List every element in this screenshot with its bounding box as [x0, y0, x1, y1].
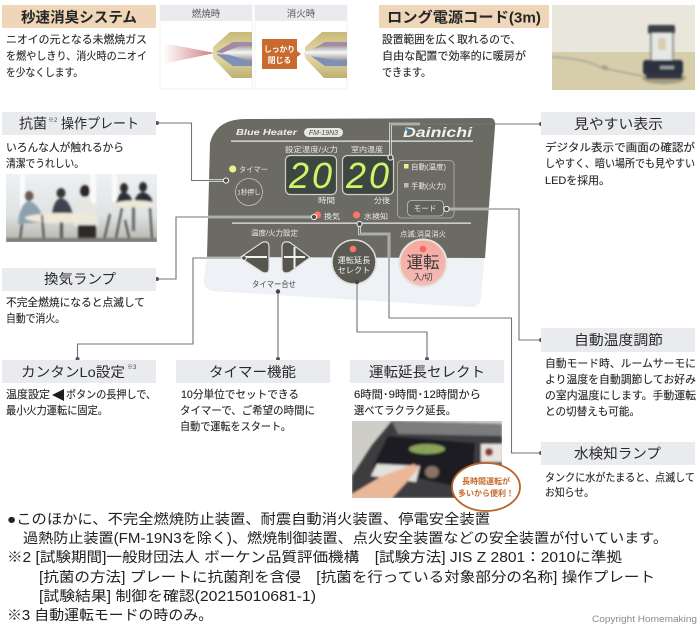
heading: easy Lo setting: カンタンLo設定 [21, 364, 125, 380]
text: ventilation description [6, 295, 145, 325]
text: display description: デジタル表示で画面の確認が [545, 140, 695, 154]
text: easy Lo description: 最小火力運転に固定。 [6, 404, 108, 417]
indicator lamps: ventilation and water detection [314, 211, 388, 221]
callout: closes tightly: 閉じる [268, 56, 291, 65]
text: long cord description [382, 32, 526, 79]
timer indicator and one-second button [229, 165, 268, 206]
panel: long power cord [379, 5, 695, 90]
text: ventilation description: 自動で消火。 [6, 311, 65, 325]
panel: rapid odor elimination system [2, 5, 347, 89]
footnotes: [試験結果] 制御を確認(20215010681-1) [39, 588, 316, 605]
display: room temperature: 分後 [374, 195, 390, 205]
button: power on off: 入/切 [413, 272, 433, 282]
heading: antibacterial plate [2, 112, 156, 135]
text: automatic temperature description: との切替えも可能。 [545, 404, 640, 418]
text: extended run description: 選べてラクラク延長。 [354, 404, 456, 417]
button: extended run select: 運転延長 [338, 255, 370, 265]
indicator lamps: ventilation and water detection: 水検知 [364, 211, 388, 221]
mode selector box: 手動(火力) [411, 180, 446, 190]
footnotes: ●このほかに、不完全燃焼防止装置、耐震自動消火装置、停電安全装置 [7, 510, 490, 528]
display: set temperature: 時間 [318, 196, 335, 205]
heading: easy Lo setting: ※3 [127, 364, 137, 371]
callout: closes tightly: しっかり [264, 45, 295, 54]
text: long cord description: 設置範囲を広く取れるので、 [382, 32, 521, 46]
text: easy Lo description: 温度設定 [6, 388, 50, 401]
text: automatic temperature description: 自動モード時、ルームサーモに [545, 356, 696, 370]
panel: timer function [176, 360, 330, 433]
heading: ventilation lamp [2, 268, 156, 291]
display: room temperature [342, 144, 394, 205]
text: automatic temperature description: の室内温度にします。手動運転 [545, 388, 696, 402]
brand: Dainichi logo: Dainichi [403, 125, 472, 140]
brand: Blue Heater model label [236, 127, 343, 137]
photo: people at cafe tables [6, 174, 157, 242]
heading: long power cord: ロング電源コード(3m) [387, 8, 541, 26]
button: power on off [400, 228, 446, 286]
footnotes [7, 510, 668, 624]
leader lines [76, 121, 543, 455]
heading: timer function [176, 360, 330, 383]
footnotes: [抗菌の方法] プレートに抗菌剤を含侵 [抗菌を行っている対象部分の名称] 操作プレート [39, 569, 655, 586]
button: power on off: 運転 [406, 253, 440, 272]
footnotes: ※3 自動運転モードの時のみ。 [7, 607, 213, 624]
photo: finger pressing heater panel [352, 421, 502, 498]
heading: extended run select [350, 360, 504, 383]
text: extended run description [354, 388, 481, 417]
text: long cord description: 自由な配置で効率的に暖房が [382, 48, 526, 62]
footnotes: ※2 [試験期間]一般財団法人 ボーケン品質評価機構 [試験方法] JIS Z 2801：2010に準拠 [7, 548, 622, 566]
control panel illustration [204, 118, 495, 307]
buttons: temperature left and right [240, 228, 310, 289]
heading: automatic temperature control [541, 328, 695, 352]
timer indicator and one-second button: タイマー [239, 165, 268, 174]
mode selector box [398, 160, 454, 218]
heading: antibacterial plate: ※2 [48, 117, 58, 124]
buttons: temperature left and right: タイマー合せ [252, 279, 296, 289]
panel: extended run select [350, 360, 520, 511]
diagram: nozzle while burning: 燃焼時 [192, 8, 221, 20]
text: easy Lo description [6, 387, 156, 417]
callout: convenient for long running: 長時間運転が [462, 476, 510, 486]
mode selector box: 自動(温度) [411, 162, 446, 172]
display: set temperature [285, 144, 338, 205]
button: extended run select [332, 240, 376, 284]
text: long cord description: できます。 [382, 66, 431, 79]
text: display description [545, 140, 695, 187]
text: timer description [180, 387, 315, 433]
heading: easy-to-see display: 見やすい表示 [574, 116, 663, 132]
button: power on off: 点滅:消臭消火 [400, 228, 446, 238]
text: antibacterial description: いろんな人が触れるから [6, 140, 124, 154]
text: antibacterial description [6, 140, 124, 170]
callout: convenient for long running [452, 463, 520, 511]
panel: automatic temperature control [541, 328, 696, 418]
panel: easy-to-see display [541, 112, 695, 187]
heading: rapid odor system: 秒速消臭システム [21, 8, 137, 26]
footnotes: 過熱防止装置(FM-19N3を除く)、燃焼制御装置、点火安全装置などの安全装置が付いています。 [23, 529, 668, 547]
display: set temperature: 設定温度/火力 [285, 144, 338, 154]
text: rapid odor description [6, 32, 147, 79]
heading: extended run select: 運転延長セレクト [369, 364, 485, 380]
timer indicator and one-second button: 1秒押し [237, 188, 261, 196]
text: rapid odor description: ニオイの元となる未燃焼ガス [6, 32, 147, 46]
callout: convenient for long running: 多いから便利！ [458, 488, 514, 498]
heading: easy Lo setting [2, 360, 156, 383]
heading: ventilation lamp: 換気ランプ [44, 271, 116, 287]
button: extended run select: セレクト [338, 266, 370, 275]
heading: antibacterial plate: 操作プレート [61, 116, 139, 132]
text: rapid odor description: を少なくします。 [6, 65, 83, 79]
indicator lamps: ventilation and water detection: 換気 [324, 211, 340, 221]
heading: antibacterial plate: 抗菌 [19, 116, 47, 132]
heading: timer function: タイマー機能 [209, 364, 296, 380]
display: room temperature: 20 [345, 155, 392, 196]
heading: rapid odor system [2, 5, 156, 28]
text: timer description: タイマーで、ご希望の時間に [180, 403, 315, 417]
diagram: nozzle while burning [160, 5, 252, 89]
heading: automatic temperature control: 自動温度調節 [574, 332, 663, 348]
display: room temperature: 室内温度 [351, 144, 383, 154]
buttons: temperature left and right: 温度/火力設定 [251, 228, 298, 238]
panel: antibacterial plate [2, 112, 157, 242]
text: water detection description: お知らせ。 [545, 485, 594, 499]
text: automatic temperature description: より温度を自動調節してお好み [545, 372, 696, 386]
diagram: nozzle when extinguished: 消火時 [287, 8, 316, 20]
text: automatic temperature description [545, 356, 696, 418]
panel: water detection lamp [541, 442, 695, 499]
display: set temperature: 20 [288, 155, 335, 196]
panel: ventilation lamp [2, 268, 156, 325]
heading: long power cord [379, 5, 549, 28]
heading: water detection lamp: 水検知ランプ [574, 446, 661, 462]
text: timer description: 自動で運転をスタート。 [180, 419, 291, 433]
brand: Blue Heater model label: FM-19N3 [309, 130, 338, 137]
text: water detection description [545, 470, 695, 499]
heading: water detection lamp [541, 442, 695, 465]
photo: heater with power cord [552, 5, 695, 90]
brand: Blue Heater model label: Blue Heater [236, 127, 298, 137]
text: ventilation description: 不完全燃焼になると点滅して [6, 295, 145, 309]
text: display description: LEDを採用。 [545, 173, 610, 187]
text: antibacterial description: 清潔でうれしい。 [6, 156, 84, 170]
panel: easy Lo setting [2, 360, 156, 417]
diagram: nozzle when extinguished [255, 5, 347, 89]
text: timer description: 10分単位でセットできる [181, 387, 299, 401]
text: easy Lo description: ボタンの長押しで、 [66, 387, 156, 401]
heading: easy-to-see display [541, 112, 695, 135]
text: rapid odor description: を燃やしきり、消火時のニオイ [6, 48, 147, 62]
mode selector box: モード [414, 204, 436, 213]
copyright: Copyright Homemaking [592, 614, 697, 624]
text: extended run description: 6時間･9時間･12時間から [354, 388, 481, 401]
callout: closes tightly [262, 39, 301, 69]
